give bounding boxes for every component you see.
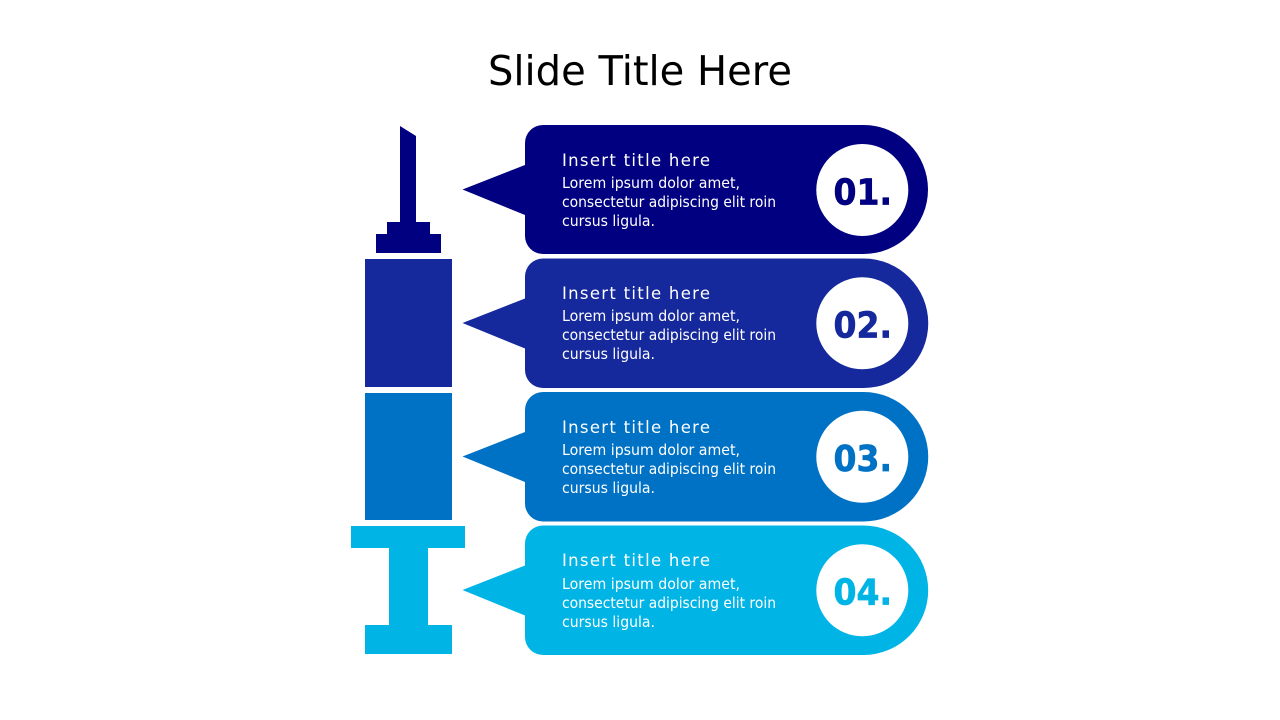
body text 01	[562, 174, 776, 230]
body text 01: Lorem ipsum dolor amet,	[562, 174, 740, 192]
heading 02: Insert title here	[562, 284, 710, 303]
callout bubble 03	[462, 392, 928, 522]
body text 03: Lorem ipsum dolor amet,	[562, 441, 740, 459]
body text 04	[562, 575, 776, 631]
heading 03: Insert title here	[562, 418, 710, 437]
syringe barrel upper	[365, 259, 452, 387]
syringe needle	[376, 126, 441, 253]
body text 01: consectetur adipiscing elit roin	[562, 193, 776, 211]
panel: step 01	[462, 125, 928, 254]
body text 02: cursus ligula.	[562, 345, 655, 363]
body text 01: cursus ligula.	[562, 212, 655, 230]
heading 01: Insert title here	[562, 151, 710, 170]
syringe barrel lower	[365, 393, 452, 520]
number badge 04: 04.	[834, 572, 892, 614]
body text 04: Lorem ipsum dolor amet,	[562, 575, 740, 593]
icon: syringe	[351, 126, 465, 654]
body text 04: consectetur adipiscing elit roin	[562, 594, 776, 612]
number badge 03: 03.	[834, 439, 892, 480]
body text 03	[562, 441, 776, 497]
body text 02: consectetur adipiscing elit roin	[562, 326, 776, 344]
body text 02	[562, 307, 776, 363]
number badge 01	[816, 144, 908, 236]
body text 04: cursus ligula.	[562, 613, 655, 631]
number badge 01: 01.	[834, 172, 892, 214]
callout bubble 02	[462, 258, 928, 388]
number badge 02	[816, 277, 908, 369]
number badge 03	[816, 411, 908, 503]
syringe plunger	[351, 526, 465, 654]
heading 04: Insert title here	[562, 551, 710, 570]
number badge 02: 02.	[834, 306, 892, 346]
panel: step 04	[462, 526, 928, 655]
body text 03: consectetur adipiscing elit roin	[562, 460, 776, 478]
callout bubble 04	[462, 526, 928, 655]
number badge 04	[816, 544, 908, 636]
body text 02: Lorem ipsum dolor amet,	[562, 307, 740, 325]
title: Slide Title Here	[488, 47, 792, 95]
callout bubble 01	[462, 125, 928, 254]
panel: step 02	[462, 258, 928, 388]
body text 03: cursus ligula.	[562, 479, 655, 497]
panel: step 03	[462, 392, 928, 522]
